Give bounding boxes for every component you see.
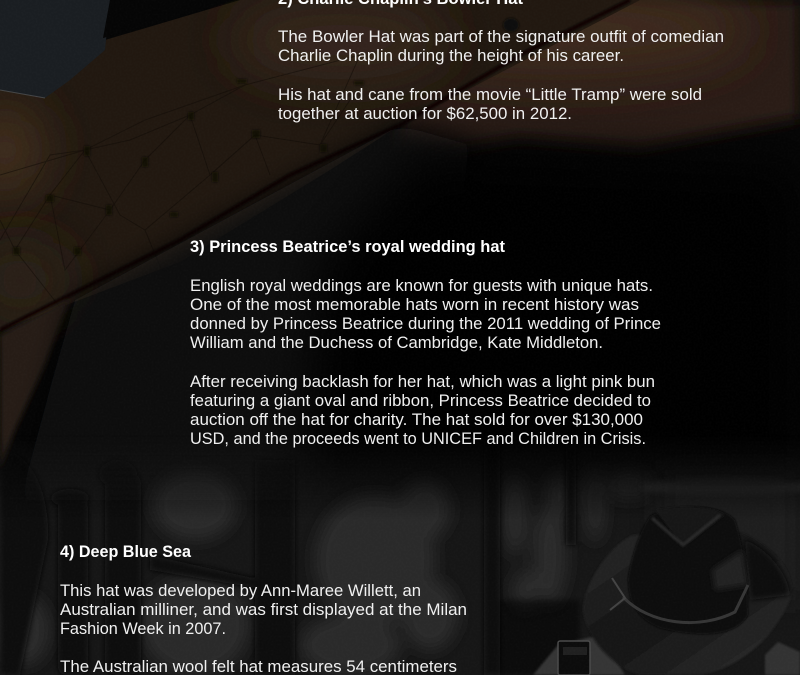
dark fabric top left — [0, 0, 110, 98]
body text — [278, 28, 724, 123]
body text: The Bowler Hat was part of the signature outfit of comedian — [278, 28, 724, 46]
body text — [60, 582, 467, 675]
body text: auction off the hat for charity. The hat sold for over $130,000 — [190, 411, 643, 429]
body text: donned by Princess Beatrice during the 2011 wedding of Prince — [190, 315, 661, 333]
body text: William and the Duchess of Cambridge, Kate Middleton. — [190, 334, 603, 352]
dark diagonal seam — [0, 0, 630, 330]
body text: featuring a giant oval and ribbon, Princess Beatrice decided to — [190, 392, 651, 410]
tufting buttons — [13, 79, 364, 255]
section 3: Princess Beatrice's royal wedding hat — [190, 238, 661, 448]
illustration: man in a fedora hat — [533, 507, 800, 675]
heading: 4) Deep Blue Sea — [60, 543, 192, 561]
section 2: Charlie Chaplin's Bowler Hat — [278, 0, 724, 123]
body text: together at auction for $62,500 in 2012. — [278, 105, 572, 123]
tufting lines — [0, 55, 360, 320]
grayscale forest — [0, 464, 800, 675]
lower-left seat wedge and navy shadow — [0, 125, 800, 520]
body text — [190, 277, 661, 448]
sofa seat left — [0, 0, 640, 330]
heading: 3) Princess Beatrice’s royal wedding hat — [190, 238, 505, 256]
body text: Fashion Week in 2007. — [60, 620, 226, 638]
body text: This hat was developed by Ann-Maree Willett, an — [60, 582, 421, 600]
section 4: Deep Blue Sea — [60, 543, 467, 675]
brim — [583, 533, 791, 675]
body text: One of the most memorable hats worn in recent history was — [190, 296, 639, 314]
body text: USD, and the proceeds went to UNICEF and Children in Crisis. — [190, 430, 646, 448]
body text: Australian milliner, and was first displayed at the Milan — [60, 601, 467, 619]
body text: After receiving backlash for her hat, which was a light pink bun — [190, 373, 655, 391]
crown — [628, 507, 748, 634]
shoulders and coat — [533, 635, 625, 675]
body text: His hat and cane from the movie “Little Tramp” were sold — [278, 86, 702, 104]
hat band — [623, 585, 748, 623]
black gap top left — [103, 0, 235, 38]
sofa back right — [370, 0, 800, 158]
backpack strap — [558, 641, 590, 675]
body text: Charlie Chaplin during the height of his career. — [278, 47, 624, 65]
body text: English royal weddings are known for guests with unique hats. — [190, 277, 653, 295]
